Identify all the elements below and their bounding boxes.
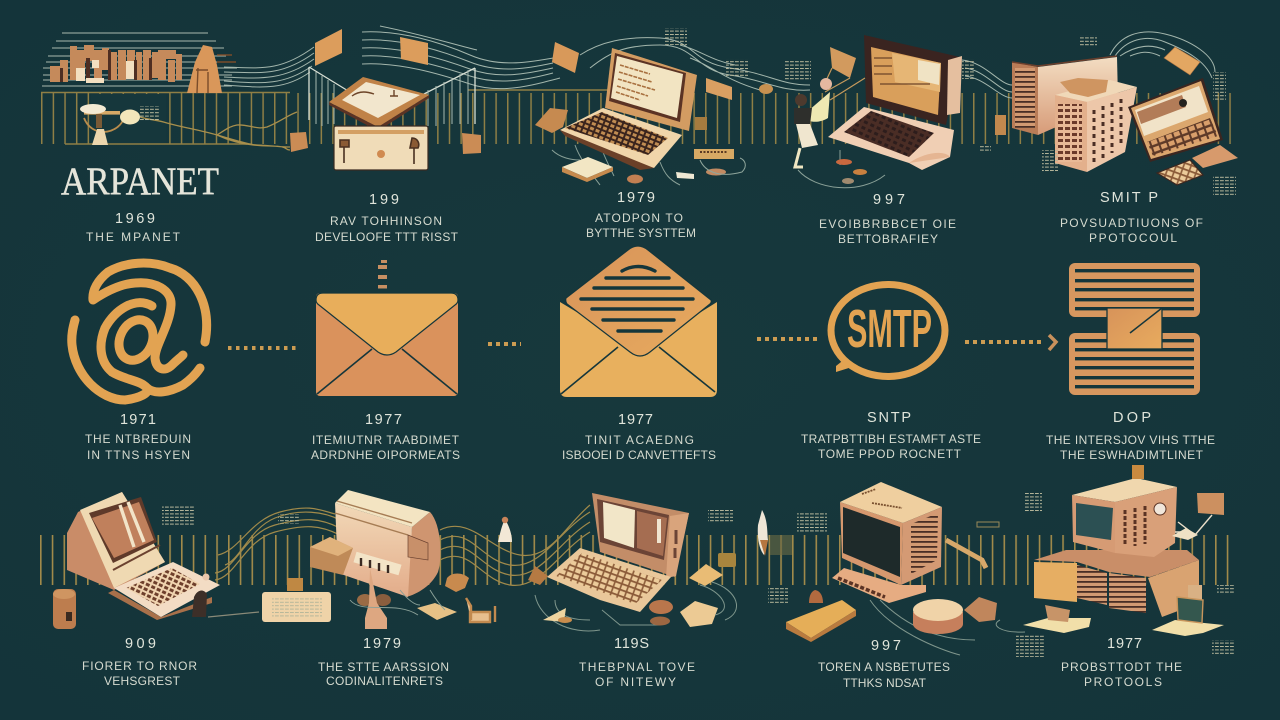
floating note card 1 [315,29,342,66]
top row captions: PPOTOCOUL [1089,231,1177,245]
top row captions: EVOIBBRBBCET OIE [819,217,956,231]
bottom row captions: OF NITEWY [595,675,676,689]
illustration: lamp operator [80,104,160,145]
illustration: ARPANET room machine [42,33,237,93]
illustration: workstation stack [1023,465,1235,654]
bottom row captions: FIORER TO RNOR [82,659,197,673]
illustration: CRT monitor with accessories [758,482,1044,657]
top row captions: RAV TOHHINSON [330,214,442,228]
middle row captions: TRATPBTTIBH ESTAMFT ASTE [801,432,981,446]
icon: open envelope with letter [560,246,717,397]
bottom row captions: 909 [125,636,156,652]
middle row captions: 1971 [120,412,156,428]
top row captions: THE MPANET [86,230,181,244]
illustration: laptop on desk [528,493,737,631]
bottom row captions: CODINALITENRETS [326,674,443,688]
bottom row captions: VEHSGREST [104,674,181,688]
connector dots 3 [757,337,818,341]
small tag right [462,133,481,154]
bottom row captions: 1977 [1107,636,1142,652]
ticks above envelope [378,260,387,288]
middle row captions: TINIT ACAEDNG [585,433,694,447]
floating note card 2 [400,37,428,65]
top row captions: POVSUADTIUONS OF [1060,216,1203,230]
top row captions: ATODPON TO [595,211,683,225]
middle row captions: 1977 [365,412,402,428]
bottom row captions [82,636,1182,690]
icon: document stack with envelope [1069,263,1200,395]
illustration: data printer unit [262,490,512,629]
top row captions: 1969 [115,211,155,227]
middle row captions [85,410,1215,462]
middle row captions: THE NTBREDUIN [85,432,191,446]
connector arrow [965,335,1056,350]
connector dots 1 [228,346,299,350]
top row captions: DEVELOOFE TTT RISST [315,230,459,244]
top row captions: SMIT P [1100,190,1158,206]
icon: closed envelope [316,293,458,396]
middle row captions: TOME PPOD ROCNETT [818,447,962,461]
bottom row captions: 997 [871,638,901,654]
bottom row captions: THEBPNAL TOVE [579,660,695,674]
bottom row captions: TTHKS NDSAT [843,676,927,690]
bottom row captions: TOREN A NSBETUTES [818,660,950,674]
illustration: open book and box [309,67,475,170]
middle row captions: ITEMIUTNR TAABDIMET [312,433,460,447]
illustration: laptop with document [535,42,697,185]
illustration: retro terminal [53,492,259,629]
middle row captions: ISBOOEI D CANVETTEFTS [562,448,716,462]
icon: at sign [72,263,207,400]
bottom row captions: PROTOOLS [1084,675,1162,689]
side props between laptops [664,28,773,176]
bottom row captions: THE STTE AARSSION [318,660,449,674]
illustration: figure and laptop [785,35,1006,188]
middle row captions: THE ESWHADIMTLINET [1060,448,1204,462]
top timeline fence [41,90,1239,144]
network wave lines top [224,26,1215,98]
connector dots 2 [488,342,521,346]
top row captions: 1979 [617,190,655,206]
bottom timeline fence [40,505,1237,585]
top row captions: BYTTHE SYSTTEM [586,226,696,240]
gold cable curves [140,112,297,150]
small tag left [290,132,308,152]
middle row captions: ADRDNHE OIPORMEATS [311,448,460,462]
top row captions [86,190,1203,246]
top row captions: 997 [873,192,905,208]
bottom row captions: 1979 [363,636,401,652]
bottom row captions: PROBSTTODT THE [1061,660,1182,674]
icon: SMTP speech bubble [831,284,945,376]
middle row captions: THE INTERSJOV VIHS TTHE [1046,433,1215,447]
bottom row captions: 119S [614,636,649,652]
icon: SMTP speech bubble: SMTP [847,299,932,359]
illustration: office towers and laptop [1012,35,1238,195]
middle row captions: SNTP [867,410,911,426]
middle row captions: DOP [1113,410,1151,426]
top row captions: BETTOBRAFIEY [838,232,938,246]
middle row captions: 1977 [618,412,653,428]
title: ARPANET: ARPANET [61,160,219,203]
top row captions: 199 [369,192,399,208]
middle row captions: IN TTNS HSYEN [87,448,190,462]
